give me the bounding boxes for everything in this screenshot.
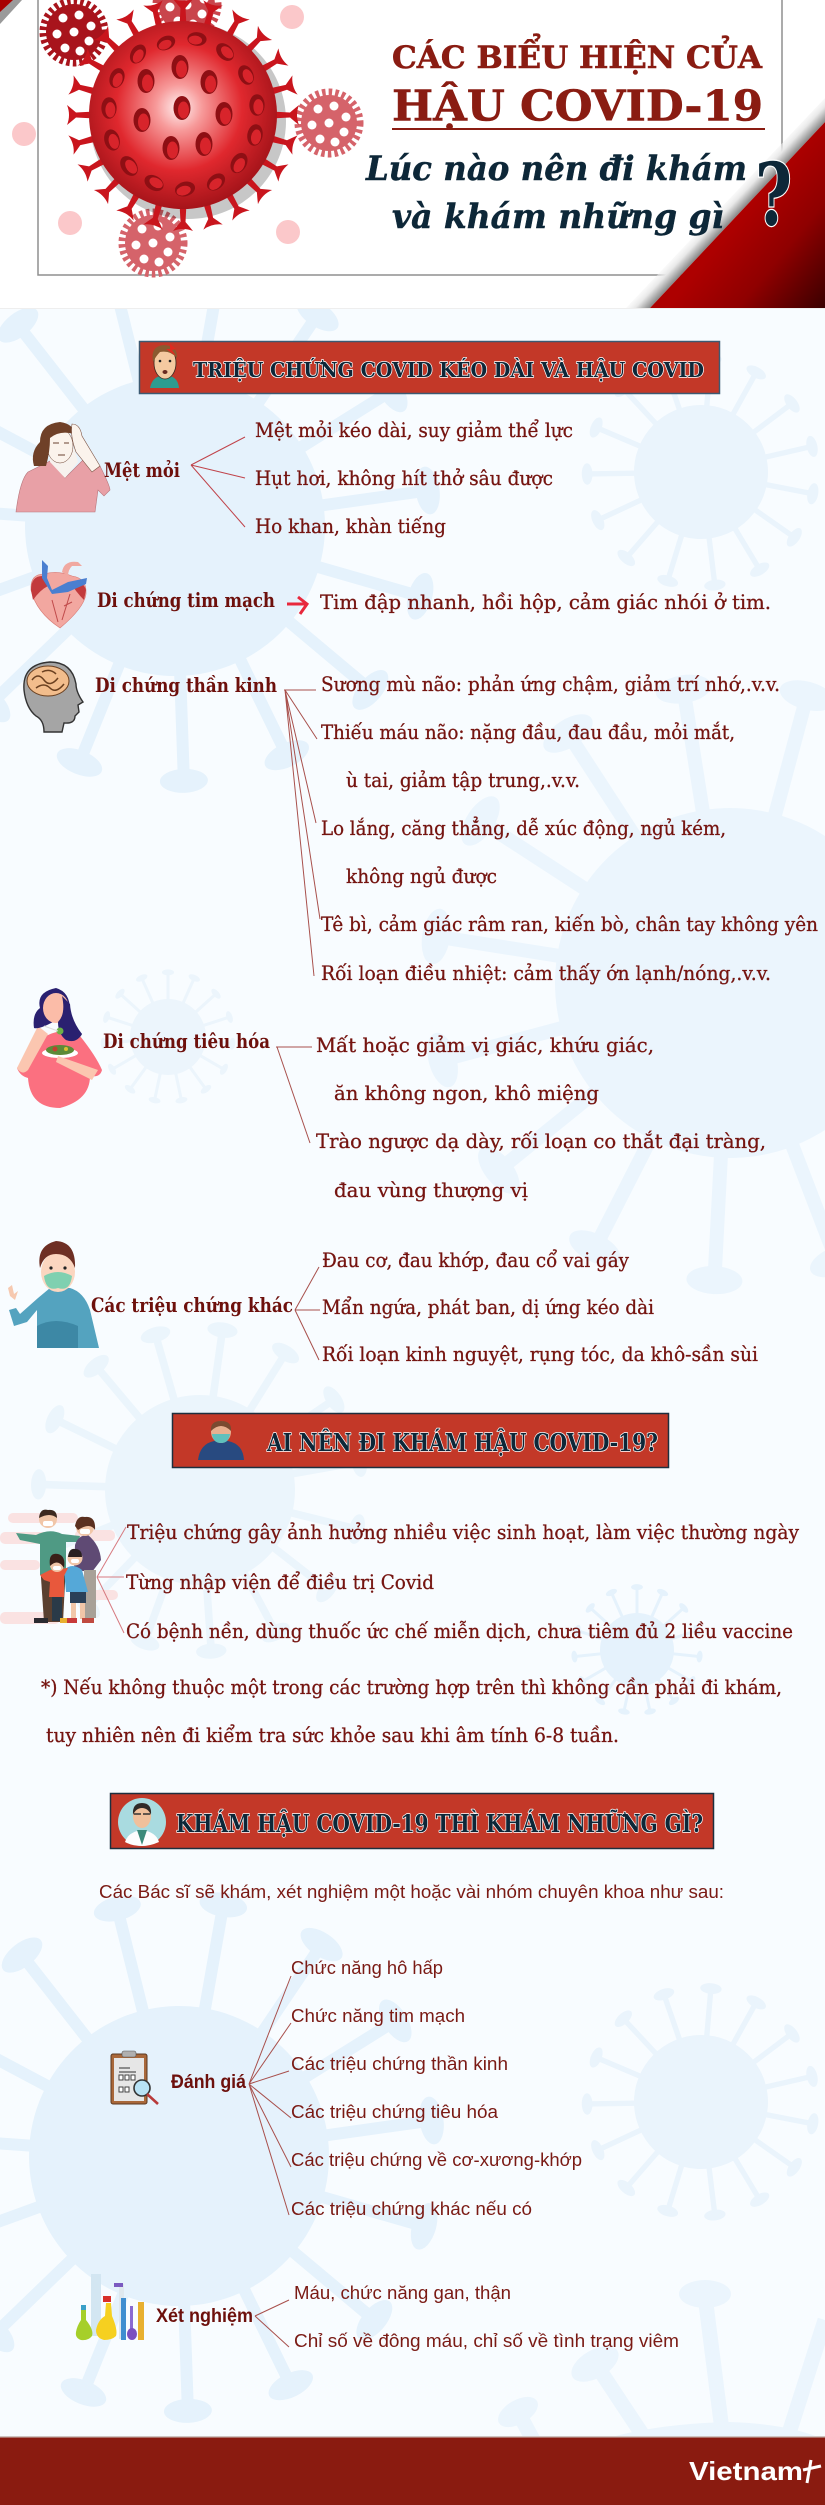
icon: headache man [150,344,179,388]
branch lines: thần kinh [284,690,320,976]
note text: tuy nhiên nên đi kiểm tra sức khỏe sau khi âm tính 6-8 tuần. [46,1723,619,1747]
text block: Mệt mỏi items: Mệt mỏi kéo dài, suy giảm thể lực [255,418,573,442]
header panel [0,0,825,309]
icon: brain head [24,662,83,732]
text block: tiêu hóa items: Mất hoặc giảm vị giác, khứu giác, [316,1034,654,1057]
text block: tiêu hóa items: Trào ngược dạ dày, rối loạn co thắt đại tràng, [316,1129,766,1153]
icon: masked person [198,1421,244,1460]
icon: small virus top [157,0,217,35]
text block: khác items: Mẩn ngứa, phát ban, dị ứng kéo dài [322,1295,654,1319]
text block: thần kinh items [321,673,818,985]
text block: đánh giá items: Các triệu chứng thần kinh [291,2053,508,2074]
text block: xét nghiệm items [294,2282,679,2351]
title [392,32,765,130]
text block: tiêu hóa items [316,1034,766,1202]
banner title: TRIỆU CHỨNG COVID KÉO DÀI VÀ HẬU COVID [193,357,704,382]
text block: khác items: Đau cơ, đau khớp, đau cổ vai gáy [322,1248,629,1272]
icon: woman eating [17,988,102,1108]
text block: Mệt mỏi items: Ho khan, khàn tiếng [255,515,446,538]
pink dots [12,5,304,244]
text block: thần kinh items: ù tai, giảm tập trung,.v.v. [346,769,580,792]
text block: đánh giá items: Chức năng tim mạch [291,2005,465,2026]
subtitle: và khám những gì [392,197,724,237]
text block: thần kinh items: Thiếu máu não: nặng đầu, đau đầu, mỏi mắt, [321,720,735,744]
icon: small pink virus bottom [123,213,183,273]
text block: who items: Có bệnh nền, dùng thuốc ức chế miễn dịch, chưa tiêm đủ 2 liều vaccine [126,1619,793,1643]
icon: doctor [118,1798,166,1846]
icon: tired woman [16,422,110,512]
arrow: heart to text [287,597,307,614]
icon: lab flasks [76,2274,144,2340]
text block: đánh giá items [291,1957,582,2219]
banner: symptoms [140,342,720,394]
text block: tiêu hóa items: ăn không ngon, khô miệng [334,1082,599,1105]
label: Mệt mỏi: Mệt mỏi [104,458,180,482]
text block: thần kinh items: không ngủ được [346,865,497,888]
text block: đánh giá items: Chức năng hô hấp [291,1957,443,1978]
text block: đánh giá items: Các triệu chứng tiêu hóa [291,2101,499,2122]
text block: who items [126,1521,799,1643]
text block: khác items: Rối loạn kinh nguyệt, rụng tóc, da khô-sần sùi [322,1343,758,1366]
subtitle: Lúc nào nên đi khám [365,149,747,189]
text block: Mệt mỏi items: Hụt hơi, không hít thở sâu được [255,467,553,490]
label: Di chứng tiêu hóa: Di chứng tiêu hóa [103,1030,270,1053]
icon: small dark virus [44,2,104,62]
intro text: Các Bác sĩ sẽ khám, xét nghiệm một hoặc vài nhóm chuyên khoa như sau: [99,1881,724,1902]
text block: xét nghiệm items: Máu, chức năng gan, thận [294,2282,511,2303]
icon: small pink virus right [299,93,359,153]
branch lines: tiêu hóa [276,1047,312,1143]
icon: masked man [8,1241,99,1348]
icon: large red virus [67,0,299,231]
text block: đánh giá items: Các triệu chứng về cơ-xương-khớp [291,2149,582,2170]
banner title: AI NÊN ĐI KHÁM HẬU COVID-19? [266,1428,658,1457]
label: Xét nghiệm: Xét nghiệm [156,2305,253,2327]
icon: family with masks [0,1510,118,1624]
icon: heart [31,560,87,628]
banner: what to examine [110,1794,714,1848]
icon: clipboard with magnifier [111,2051,158,2104]
label: Di chứng tim mạch: Di chứng tim mạch [97,589,275,612]
note text [41,1676,782,1747]
text block: thần kinh items: Lo lắng, căng thẳng, dễ xúc động, ngủ kém, [321,815,726,840]
logo: Vietnam+: Vietnam [689,2456,803,2486]
branch lines: đánh giá [249,1976,291,2215]
title: HẬU COVID-19 [392,80,763,130]
title: CÁC BIỂU HIỆN CỦA [392,32,763,76]
text block: Mệt mỏi items [255,418,573,538]
note text: *) Nếu không thuộc một trong các trường hợp trên thì không cần phải đi khám, [41,1676,782,1699]
text block: đánh giá items: Các triệu chứng khác nếu có [291,2198,532,2219]
text: heart symptoms: Tim đập nhanh, hồi hộp, cảm giác nhói ở tim. [320,591,771,614]
label: Di chứng thần kinh: Di chứng thần kinh [95,673,277,697]
text block: thần kinh items: Sương mù não: phản ứng chậm, giảm trí nhớ,.v.v. [321,673,780,696]
branch lines: who [97,1527,126,1633]
text block: tiêu hóa items: đau vùng thượng vị [334,1179,528,1202]
banner: who should visit [172,1414,668,1468]
text block: khác items [322,1248,758,1366]
subtitle [365,149,747,237]
banner title: KHÁM HẬU COVID-19 THÌ KHÁM NHỮNG GÌ? [176,1809,703,1838]
branch lines: Mệt mỏi [191,437,245,527]
text block: xét nghiệm items: Chỉ số về đông máu, chỉ số về tình trạng viêm [294,2330,679,2351]
branch lines: khác [295,1267,320,1360]
branch lines: xét nghiệm [255,2300,289,2347]
text block: thần kinh items: Rối loạn điều nhiệt: cảm thấy ớn lạnh/nóng,.v.v. [321,962,771,985]
footer bar [0,2436,825,2505]
text block: who items: Triệu chứng gây ảnh hưởng nhiều việc sinh hoạt, làm việc thường ngày [127,1521,799,1544]
text block: who items: Từng nhập viện để điều trị Covid [126,1570,434,1594]
label: Các triệu chứng khác: Các triệu chứng khác [91,1294,293,1317]
icon: question mark: ? [755,145,792,246]
label: Đánh giá: Đánh giá [171,2071,246,2093]
